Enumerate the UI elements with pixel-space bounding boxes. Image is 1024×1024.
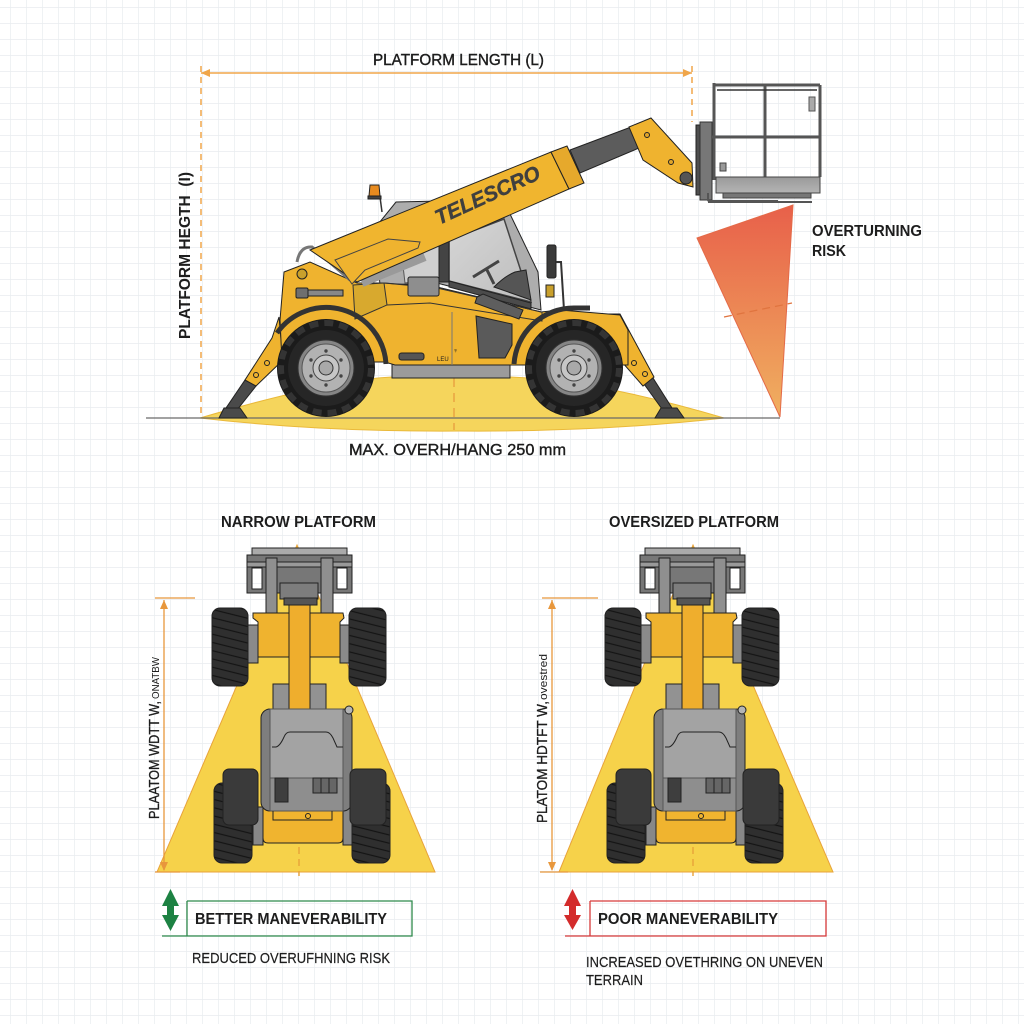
oversized width label: PLATOM HDTFT W,ovestred	[534, 654, 551, 823]
overturning risk label: RISK	[812, 243, 846, 260]
chassis	[392, 364, 510, 378]
side mirror	[546, 245, 564, 310]
narrow width label: PLAATOM WDTT W,ONATBW	[146, 656, 163, 819]
overturning risk wedge	[697, 205, 793, 417]
oversized platform heading: OVERSIZED PLATFORM	[609, 514, 779, 531]
hydraulic hose	[297, 247, 350, 280]
better maneuverability box: BETTER MANEVERABILITY	[195, 911, 387, 928]
overturning risk label: OVERTURNING	[812, 223, 922, 240]
poor maneuverability note: TERRAIN	[586, 972, 643, 989]
poor maneuverability box: POOR MANEVERABILITY	[598, 911, 778, 928]
rear outrigger	[219, 317, 283, 418]
main boom	[310, 152, 569, 282]
better maneuverability box	[162, 901, 412, 936]
boom collar	[551, 146, 584, 189]
dimension: platform length	[201, 52, 692, 415]
narrow platform stability zone	[157, 545, 435, 876]
rear wheel	[277, 319, 375, 417]
front wheel	[525, 319, 623, 417]
narrow platform vehicle, top view	[212, 548, 390, 863]
oversized platform vehicle, top view	[605, 548, 783, 863]
cab	[375, 200, 541, 310]
poor maneuverability box	[565, 901, 826, 936]
body details: ♆	[453, 348, 458, 355]
icon: green double arrow	[162, 889, 179, 931]
inner boom	[570, 127, 639, 173]
narrow platform heading: NARROW PLATFORM	[221, 514, 376, 531]
oversized width dimension	[540, 598, 598, 872]
wheel arches	[277, 307, 590, 364]
boom brand: TELESCRO	[432, 162, 544, 230]
icon: red double arrow	[564, 889, 581, 930]
overhang label: MAX. OVERH/HANG 250 mm	[349, 442, 566, 459]
telehandler side view	[219, 118, 693, 418]
better maneuverability note: REDUCED OVERUFHNING RISK	[192, 950, 390, 967]
boom head	[629, 118, 693, 187]
dimension: platform height label: PLATFORM HEGTH (I)	[177, 172, 194, 339]
poor maneuverability note: INCREASED OVETHRING ON UNEVEN	[586, 954, 823, 971]
lift cylinder	[362, 257, 425, 283]
side view: stability footprint	[146, 377, 780, 431]
narrow width dimension	[155, 598, 195, 872]
front outrigger	[605, 314, 684, 418]
work platform	[696, 83, 820, 202]
main body	[280, 262, 628, 365]
oversized platform stability zone	[559, 545, 833, 876]
body details: LEU	[437, 357, 449, 363]
dimension: platform length: PLATFORM LENGTH (L)	[373, 52, 544, 69]
warning beacon	[368, 185, 382, 212]
body details	[296, 269, 542, 365]
